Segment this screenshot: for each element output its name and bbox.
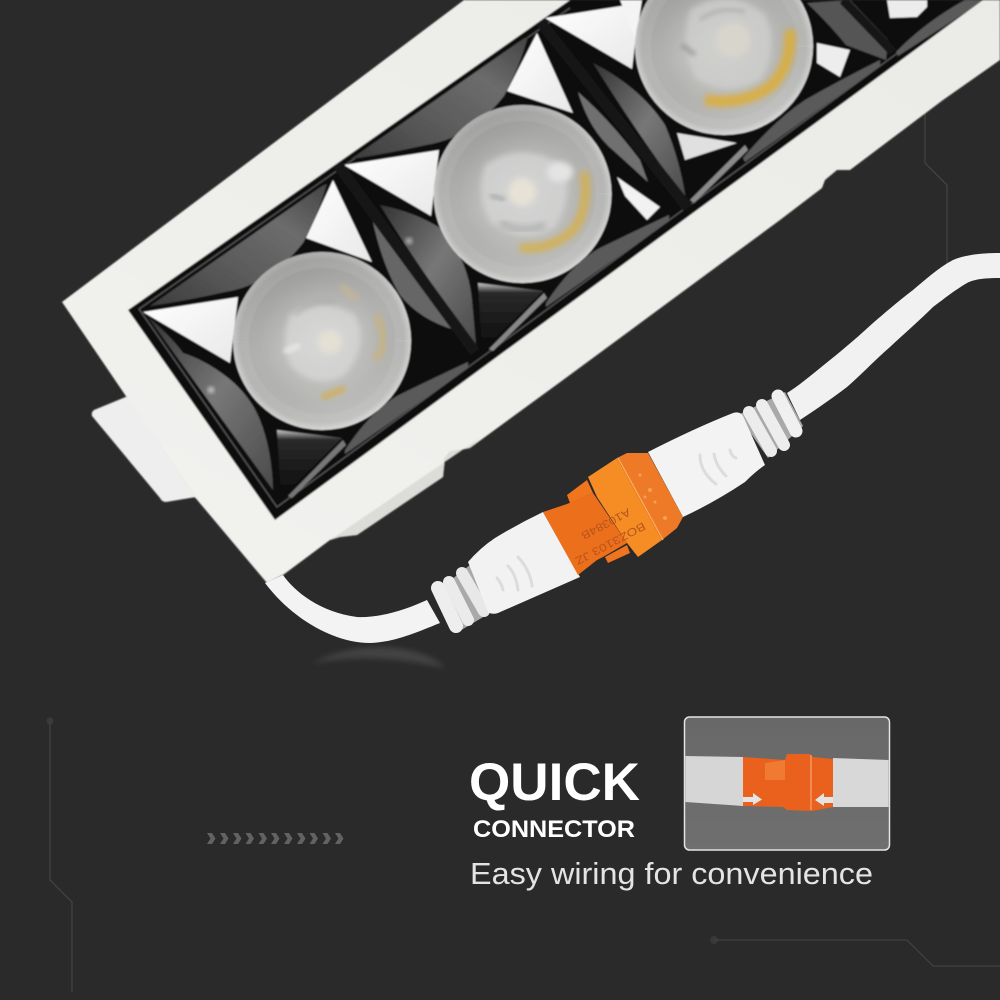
orange left body <box>543 493 627 575</box>
orange lower tab <box>605 545 630 563</box>
left strain relief ribs <box>438 565 495 632</box>
left arrow <box>743 793 762 805</box>
reflector cells <box>143 0 985 498</box>
right boot grip marks <box>700 450 736 484</box>
subheading: CONNECTOR: CONNECTOR <box>473 816 635 843</box>
orange centre band <box>588 458 662 557</box>
quick connector plug <box>438 392 803 632</box>
right white tube <box>833 758 888 807</box>
orange connector <box>743 754 833 811</box>
left boot grip marks <box>497 557 532 590</box>
circuit line: left <box>46 718 72 992</box>
orange speckled band <box>617 453 683 540</box>
orange upper tab <box>567 480 593 503</box>
band seam <box>618 458 663 540</box>
cell 1 reflectors <box>143 180 468 498</box>
upper cable <box>787 253 1000 420</box>
moulded part text <box>572 505 647 567</box>
speckle highlights <box>638 474 667 520</box>
mounting tab <box>92 396 196 502</box>
connector clip <box>765 760 785 780</box>
lower cable <box>265 575 440 643</box>
tagline: Easy wiring for convenience <box>470 856 873 891</box>
left white tube <box>686 756 743 806</box>
cable reflection <box>312 647 445 668</box>
moulded part text: A10384B <box>579 505 632 541</box>
connector seam <box>810 755 812 810</box>
lens 2 <box>434 105 612 283</box>
right white boot <box>648 412 765 517</box>
right arrow <box>815 793 833 806</box>
cell dividers <box>338 0 893 352</box>
LED fixture <box>62 0 1000 583</box>
heading: QUICK: QUICK <box>469 753 640 812</box>
right strain relief ribs <box>738 392 803 458</box>
frame lower lip shade <box>330 438 480 540</box>
lens 1 <box>233 252 411 430</box>
white frame <box>62 0 1000 583</box>
cell 3 reflectors <box>545 0 888 203</box>
window inner chrome line <box>139 0 970 507</box>
circuit line: bottom right <box>710 936 1000 966</box>
circuit line: upper right <box>925 110 947 268</box>
cell 4 reflectors <box>887 0 985 56</box>
left white boot <box>468 512 580 614</box>
inset photo panel <box>684 717 890 850</box>
chevron row <box>207 833 344 844</box>
window recess <box>128 0 983 520</box>
lens 3 <box>635 0 813 135</box>
moulded part text: BOZ3103 JZ <box>572 519 647 567</box>
cell 2 reflectors <box>344 33 669 351</box>
